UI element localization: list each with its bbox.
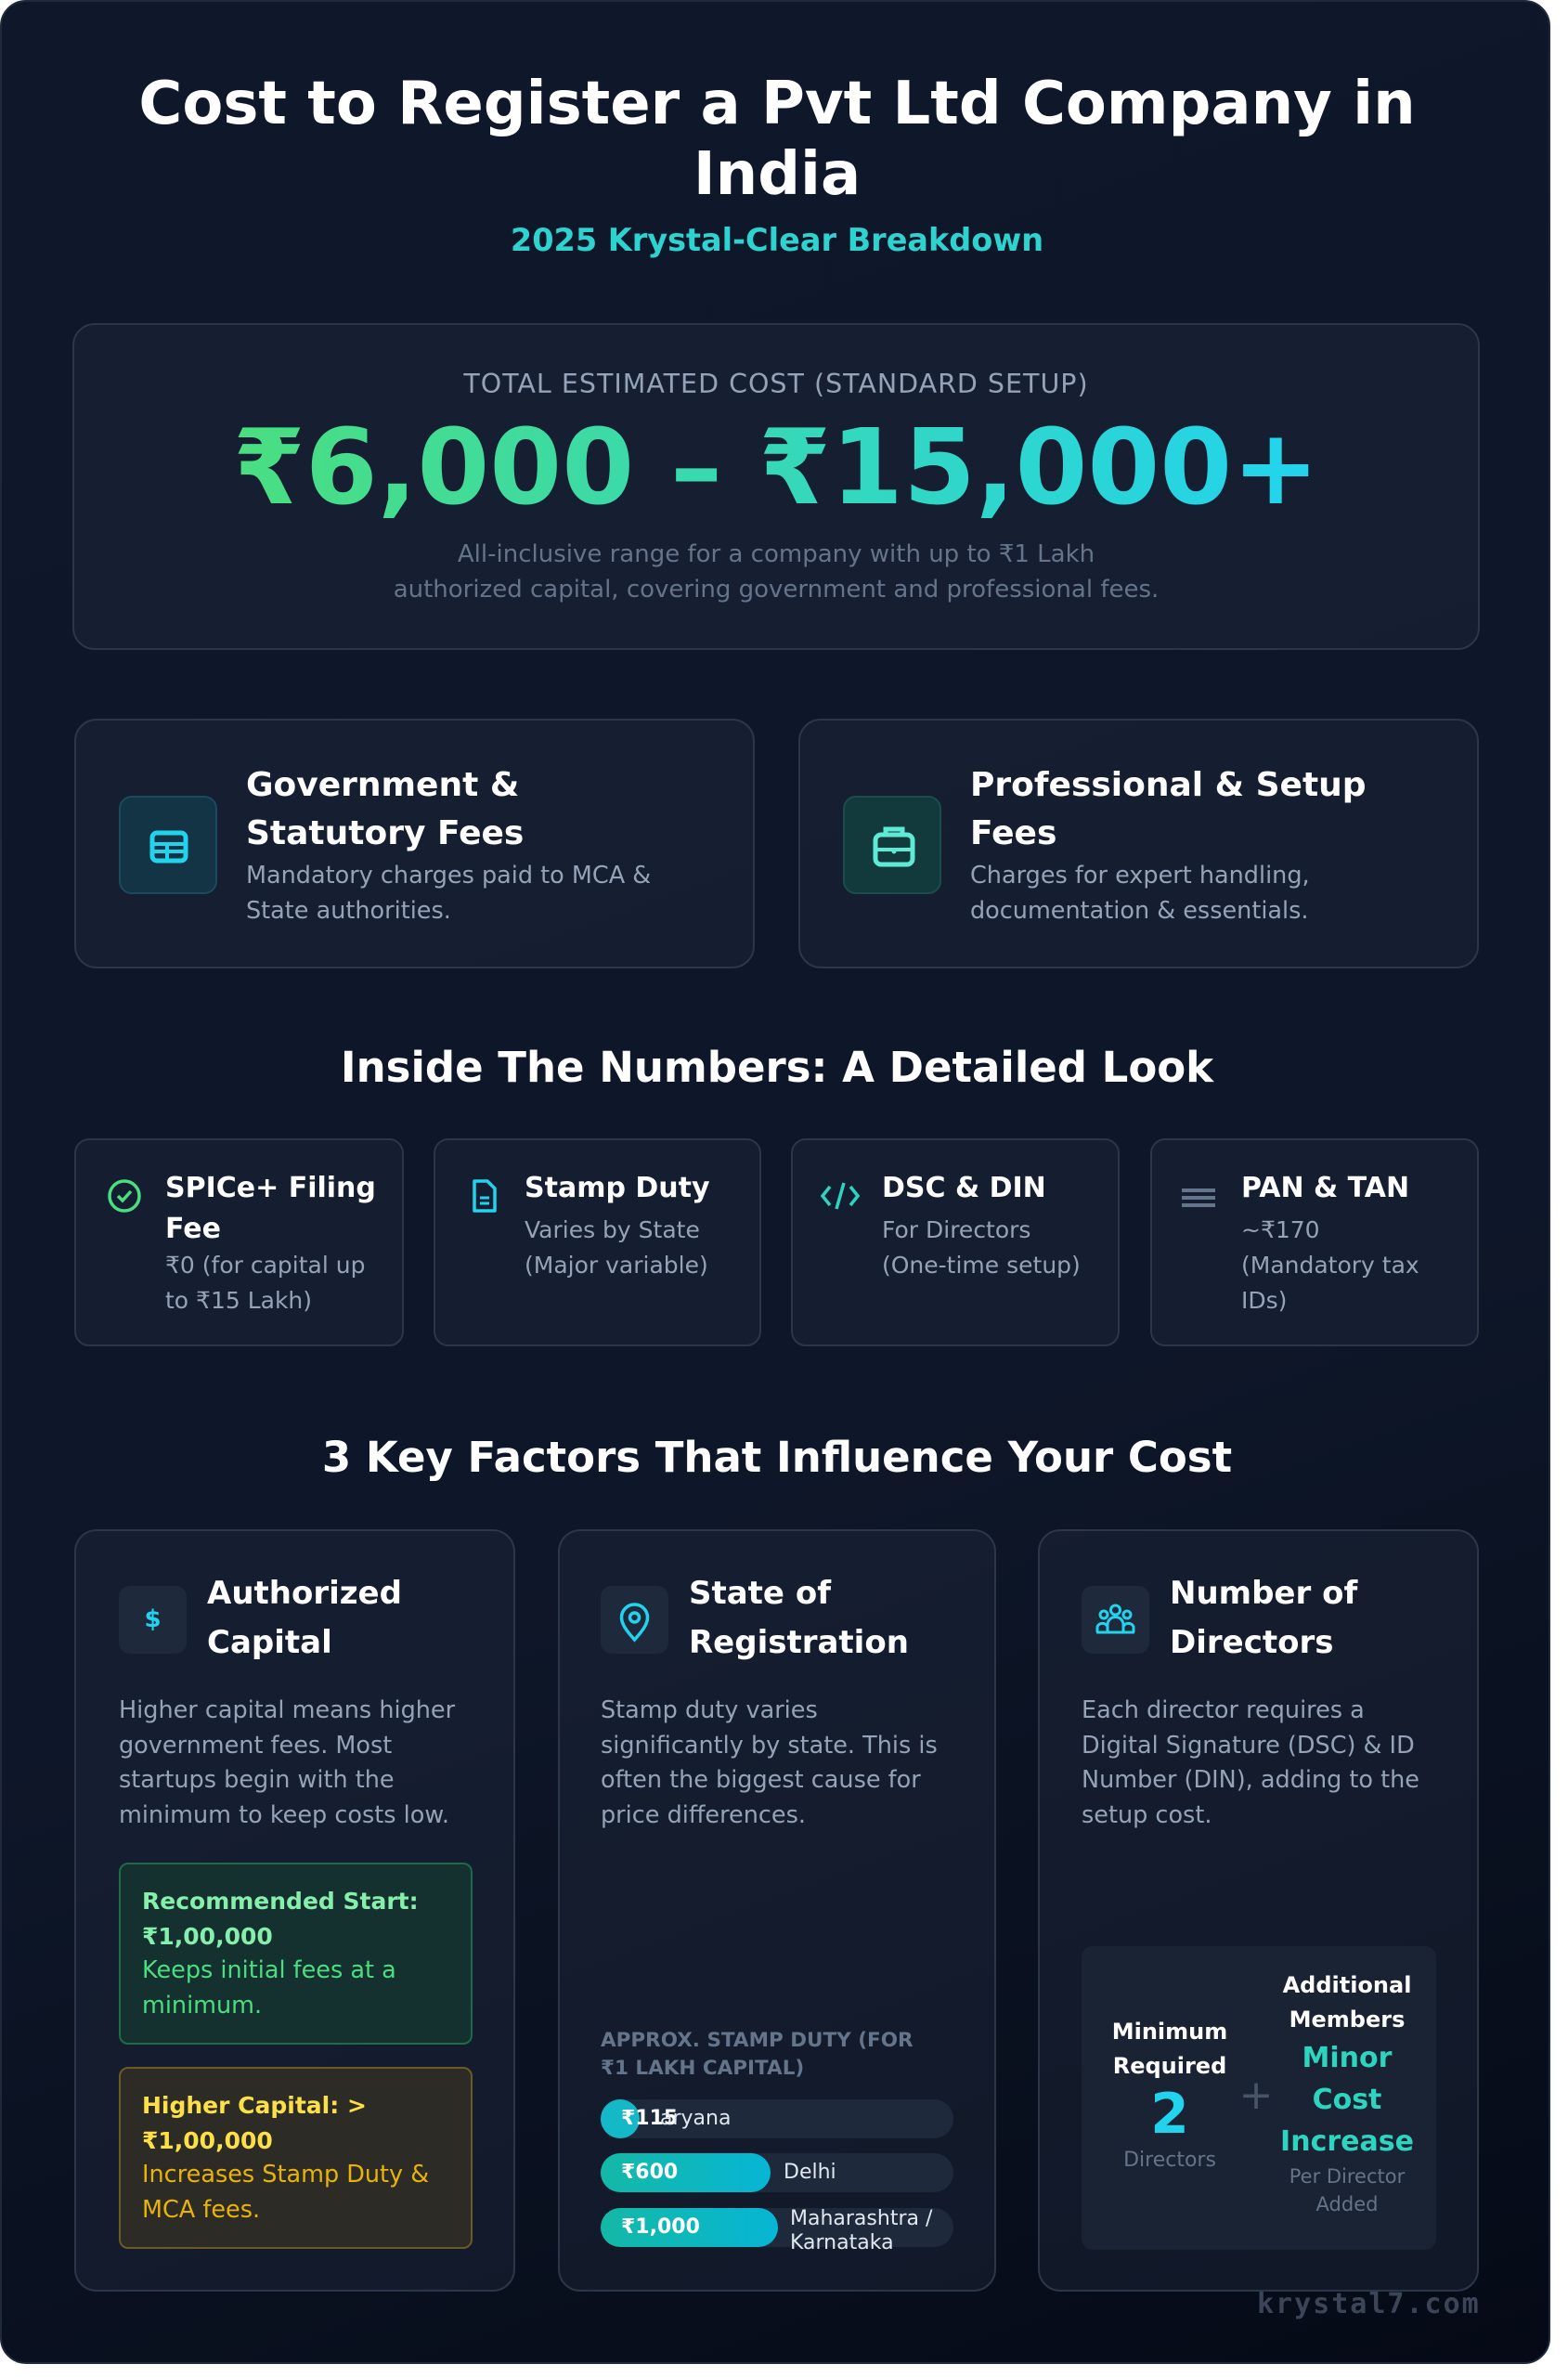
- icon: code: [821, 1183, 860, 1209]
- title: DSC & DIN: [882, 1172, 1046, 1204]
- heading: Directors: [1170, 1624, 1333, 1661]
- text: [525, 1216, 708, 1279]
- description: Digital Signature (DSC) & ID: [1082, 1731, 1415, 1759]
- additional members: [1280, 1972, 1414, 2215]
- additional members: Per Director: [1289, 2165, 1405, 2188]
- callout: higher capital: MCA fees.: [142, 2195, 260, 2223]
- card: pan & tan: [1150, 1138, 1479, 1346]
- description: authorized capital, covering government and professional fees.: [394, 576, 1159, 604]
- heading: key factors: 3 Key Factors That Influence Your Cost: [322, 1433, 1232, 1482]
- additional members: Added: [1316, 2193, 1378, 2215]
- text: (Mandatory tax: [1241, 1252, 1419, 1279]
- chart label: ₹1 LAKH CAPITAL): [601, 2057, 804, 2080]
- title: Cost to Register a Pvt Ltd Company in: [138, 70, 1416, 138]
- callout: recommended: ₹1,00,000: [142, 1922, 273, 1950]
- additional members: Additional: [1283, 1972, 1411, 1998]
- callout: higher capital: ₹1,00,000: [142, 2126, 273, 2154]
- heading: Statutory Fees: [246, 814, 524, 852]
- text: ₹0 (for capital up: [165, 1252, 365, 1279]
- text: IDs): [1241, 1287, 1287, 1314]
- icon: briefcase: [843, 796, 941, 894]
- title: PAN & TAN: [1241, 1172, 1409, 1204]
- additional members: Members: [1289, 2007, 1405, 2033]
- icon: dollar: [119, 1586, 187, 1654]
- title: SPICe+ Filing: [165, 1172, 376, 1204]
- heading: Registration: [689, 1624, 909, 1661]
- text: (One-time setup): [882, 1252, 1081, 1279]
- description: startups begin with the: [119, 1766, 395, 1794]
- card: dsc & din: [791, 1138, 1120, 1346]
- icon: location pin: [601, 1586, 668, 1654]
- heading: Capital: [207, 1624, 332, 1661]
- callout: higher capital: Higher Capital: >: [142, 2092, 367, 2119]
- description: setup cost.: [1082, 1801, 1212, 1829]
- icon: check: [108, 1179, 141, 1213]
- description: Charges for expert handling,: [970, 862, 1310, 890]
- description: [601, 1696, 938, 1829]
- panel: government fees: [74, 719, 755, 968]
- description: All-inclusive range for a company with up to ₹1 Lakh: [458, 540, 1095, 568]
- description: [394, 540, 1159, 604]
- heading: [970, 766, 1367, 852]
- title: Fee: [165, 1213, 221, 1245]
- big number: ₹6,000 – ₹15,000+: [233, 408, 1319, 528]
- card: stamp duty: [434, 1138, 761, 1346]
- callout: recommended: minimum.: [142, 1991, 262, 2019]
- minimum required: 2: [1150, 2082, 1189, 2147]
- text: (Major variable): [525, 1252, 708, 1279]
- text: [1241, 1216, 1419, 1314]
- subtitle: 2025 Krystal-Clear Breakdown: [511, 222, 1043, 258]
- callout: higher capital: Increases Stamp Duty &: [142, 2161, 429, 2189]
- bar chart: stamp duty: [601, 2029, 953, 2254]
- heading: Fees: [970, 814, 1056, 852]
- description: Mandatory charges paid to MCA &: [246, 862, 651, 890]
- callout: higher capital: [119, 2067, 473, 2249]
- bar: maharashtra: Maharashtra /: [790, 2207, 932, 2230]
- description: minimum to keep costs low.: [119, 1801, 449, 1829]
- director summary box: [1082, 1946, 1436, 2250]
- description: price differences.: [601, 1801, 806, 1829]
- icon: document: [473, 1179, 497, 1213]
- heading: Government &: [246, 766, 519, 804]
- text: For Directors: [882, 1216, 1030, 1243]
- description: Higher capital means higher: [119, 1696, 455, 1724]
- bar: maharashtra: Karnataka: [790, 2231, 894, 2254]
- chart label: APPROX. STAMP DUTY (FOR: [601, 2029, 914, 2052]
- text: ~₹170: [1241, 1216, 1320, 1243]
- plus sign: +: [1239, 2072, 1273, 2119]
- bar: haryana: [601, 2099, 953, 2138]
- additional members: Increase: [1280, 2125, 1414, 2158]
- bar: delhi: [601, 2153, 953, 2192]
- description: Stamp duty varies: [601, 1696, 818, 1724]
- description: [246, 862, 651, 925]
- title: India: [693, 140, 861, 209]
- text: [882, 1216, 1081, 1279]
- callout: recommended: Keeps initial fees at a: [142, 1956, 396, 1984]
- heading: Number of: [1170, 1575, 1357, 1612]
- bar: maharashtra: [601, 2208, 953, 2247]
- description: Each director requires a: [1082, 1696, 1365, 1724]
- panel: state of registration: [558, 1529, 996, 2292]
- label: TOTAL ESTIMATED COST (STANDARD SETUP): [463, 369, 1089, 399]
- panel: total estimated cost: [72, 323, 1480, 650]
- card: spice filing fee: [74, 1138, 404, 1346]
- text: [165, 1252, 365, 1314]
- description: government fees. Most: [119, 1731, 392, 1759]
- minimum required: Required: [1113, 2053, 1226, 2079]
- additional members: Cost: [1313, 2084, 1381, 2116]
- chart label: [601, 2029, 914, 2080]
- bar: haryana: ₹115: [621, 2107, 678, 2130]
- description: documentation & essentials.: [970, 897, 1309, 925]
- text: Varies by State: [525, 1216, 700, 1243]
- minimum required: Directors: [1123, 2149, 1216, 2172]
- description: often the biggest cause for: [601, 1766, 921, 1794]
- heading: [246, 766, 524, 852]
- bar: delhi: Delhi: [784, 2161, 836, 2184]
- minimum required: [1112, 2019, 1227, 2172]
- title: [138, 70, 1416, 209]
- callout: recommended: [119, 1863, 473, 2045]
- heading: [689, 1575, 909, 1661]
- icon: fees table: [119, 796, 217, 894]
- bar: maharashtra: ₹1,000: [621, 2215, 700, 2239]
- heading: inside the numbers: Inside The Numbers: A Detailed Look: [341, 1043, 1213, 1092]
- panel: number of directors: [1038, 1529, 1479, 2292]
- heading: Professional & Setup: [970, 766, 1367, 804]
- panel: authorized capital: [74, 1529, 515, 2292]
- icon: people: [1082, 1586, 1149, 1654]
- description: [119, 1696, 455, 1829]
- description: [1082, 1696, 1419, 1829]
- bar: delhi: ₹600: [621, 2161, 678, 2184]
- minimum required: Minimum: [1112, 2019, 1227, 2045]
- text: to ₹15 Lakh): [165, 1287, 312, 1314]
- bar: haryana: aryana: [660, 2107, 731, 2130]
- icon: dollar: $: [144, 1605, 162, 1633]
- callout: recommended: Recommended Start:: [142, 1888, 419, 1915]
- icon: lines: [1182, 1188, 1215, 1207]
- heading: [207, 1575, 402, 1661]
- title: Stamp Duty: [525, 1172, 710, 1204]
- description: Number (DIN), adding to the: [1082, 1766, 1419, 1794]
- heading: [1170, 1575, 1358, 1661]
- description: significantly by state. This is: [601, 1731, 938, 1759]
- title: [165, 1172, 376, 1245]
- heading: Authorized: [207, 1575, 402, 1612]
- description: State authorities.: [246, 897, 451, 925]
- additional members: Minor: [1302, 2042, 1392, 2074]
- heading: State of: [689, 1575, 831, 1612]
- panel: professional fees: [798, 719, 1479, 968]
- description: [970, 862, 1310, 925]
- watermark: krystal7.com: [1257, 2288, 1481, 2320]
